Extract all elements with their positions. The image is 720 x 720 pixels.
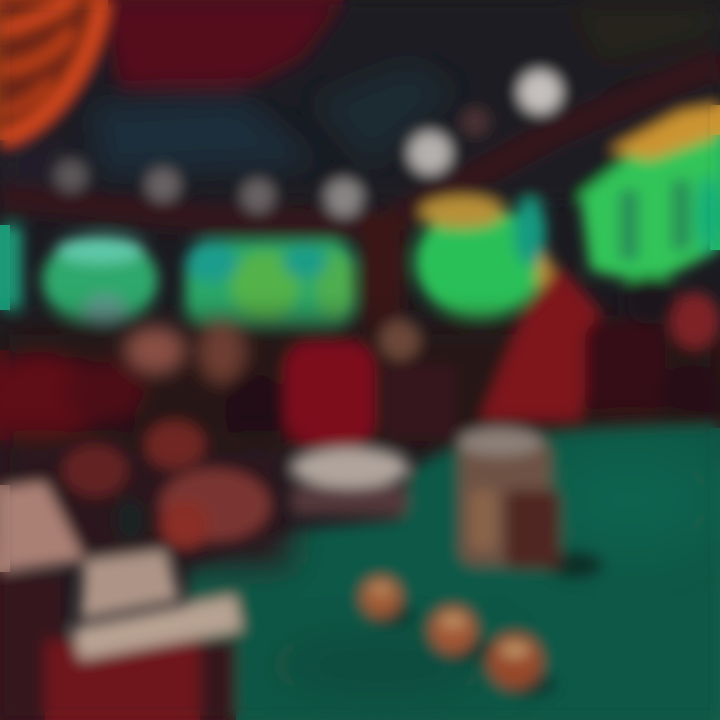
- panel: green windows: [0, 105, 720, 328]
- dice on table: [361, 577, 558, 697]
- ceiling lights: [55, 71, 561, 217]
- panel: green table: [170, 425, 720, 720]
- cards and cup at lower left: [45, 550, 242, 720]
- panel: left table items: [0, 421, 290, 720]
- stack of white cards: [292, 448, 408, 515]
- chips stack on table: [458, 428, 603, 579]
- decorative ceiling beams: [0, 62, 720, 225]
- panel: ceiling: [0, 0, 720, 200]
- icon: neon sign: [0, 0, 112, 145]
- panel: crowd: [0, 265, 720, 450]
- decorative pillar: [362, 215, 404, 345]
